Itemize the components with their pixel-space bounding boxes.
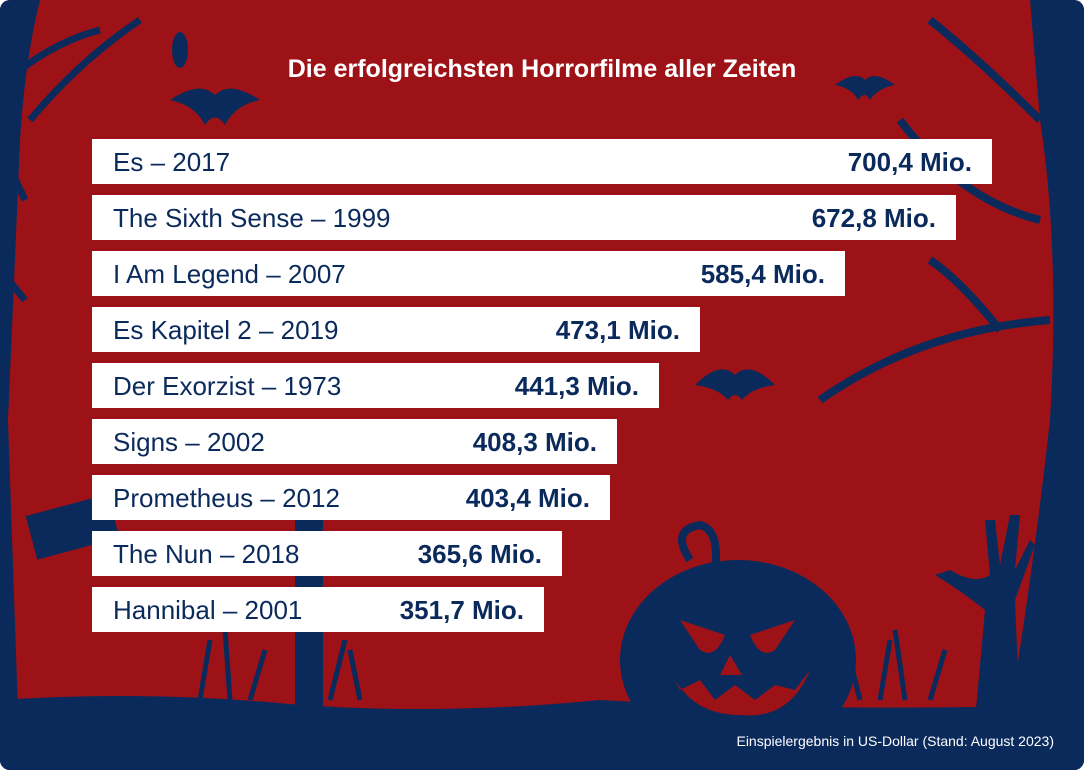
bar: Es Kapitel 2: 473,1 Mio. bbox=[556, 315, 680, 345]
bar: Signs bbox=[92, 419, 617, 464]
bar: The Nun: 365,6 Mio. bbox=[418, 539, 542, 569]
bar: I Am Legend bbox=[92, 251, 845, 296]
bar: Hannibal bbox=[92, 587, 544, 632]
bar chart bbox=[92, 139, 992, 632]
bar: The Sixth Sense: The Sixth Sense – 1999 bbox=[113, 203, 391, 233]
left tree bbox=[0, 0, 40, 770]
bar: Signs: 408,3 Mio. bbox=[473, 427, 597, 457]
bar: The Sixth Sense: 672,8 Mio. bbox=[812, 203, 936, 233]
bar: Prometheus: 403,4 Mio. bbox=[466, 483, 590, 513]
post bbox=[295, 520, 323, 710]
bar: The Nun: The Nun – 2018 bbox=[113, 539, 299, 569]
bar: Hannibal: Hannibal – 2001 bbox=[113, 595, 302, 625]
hand bbox=[935, 515, 1035, 720]
bar: Es bbox=[92, 139, 992, 184]
bar: I Am Legend: 585,4 Mio. bbox=[701, 259, 825, 289]
bar: Prometheus bbox=[92, 475, 610, 520]
ground bbox=[0, 696, 1084, 770]
bar: Es: 700,4 Mio. bbox=[848, 147, 972, 177]
bar: The Sixth Sense bbox=[92, 195, 956, 240]
footer note: Einspielergebnis in US-Dollar (Stand: August 2023) bbox=[736, 733, 1054, 749]
right tree bbox=[1000, 0, 1084, 770]
grass bbox=[200, 630, 945, 700]
pumpkin bbox=[620, 560, 856, 760]
bar: Es Kapitel 2 bbox=[92, 307, 700, 352]
bar: Es: Es – 2017 bbox=[113, 147, 230, 177]
bar: Hannibal: 351,7 Mio. bbox=[400, 595, 524, 625]
sign bbox=[26, 494, 119, 560]
bar: Der Exorzist: Der Exorzist – 1973 bbox=[113, 371, 341, 401]
bar: The Nun bbox=[92, 531, 562, 576]
bar: Der Exorzist: 441,3 Mio. bbox=[515, 371, 639, 401]
bar: Es Kapitel 2: Es Kapitel 2 – 2019 bbox=[113, 315, 338, 345]
title: Die erfolgreichsten Horrorfilme aller Zeiten bbox=[288, 55, 796, 83]
bar: Signs: Signs – 2002 bbox=[113, 427, 265, 457]
bar: Prometheus: Prometheus – 2012 bbox=[113, 483, 340, 513]
bats bbox=[170, 89, 260, 125]
bar: I Am Legend: I Am Legend – 2007 bbox=[113, 259, 346, 289]
bar: Der Exorzist bbox=[92, 363, 659, 408]
